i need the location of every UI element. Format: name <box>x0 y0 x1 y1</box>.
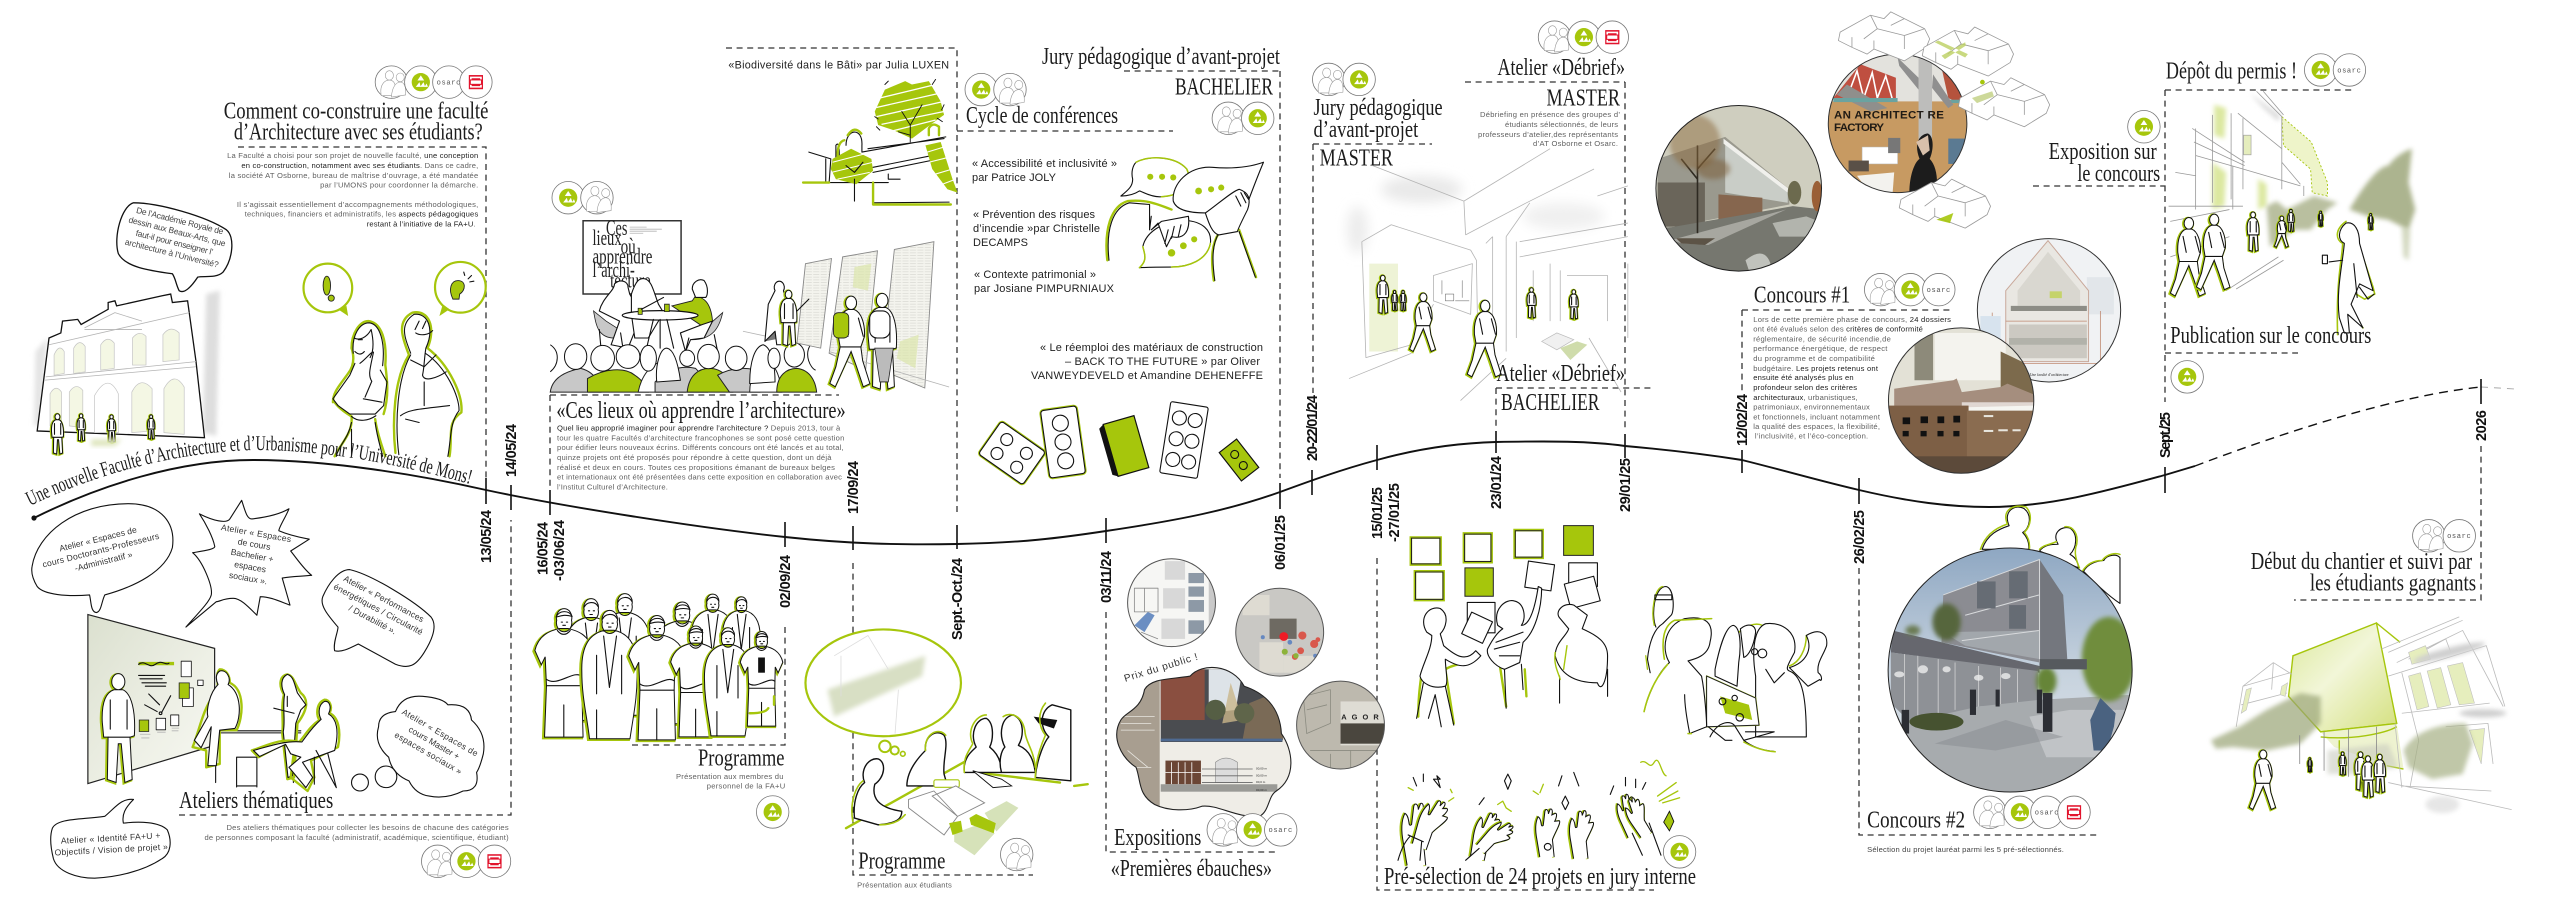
heading: exposition: Exposition sur <box>2049 138 2157 165</box>
logos <box>375 66 492 98</box>
heading: Concours #1 <box>1754 282 1850 309</box>
subheading: «Premières ébauches» <box>1111 855 1272 882</box>
speech bubble: star: Atelier « Espaces <box>220 522 292 544</box>
icon: light bulb bubble <box>435 262 486 316</box>
panel: expositions <box>1111 558 1385 882</box>
thought bubble: master: cours Master + <box>407 724 461 761</box>
timeline date labels: 03/11/24 <box>1099 551 1115 603</box>
text block: et fonctionnels, incluant notamment <box>1753 412 1881 421</box>
text block: Débriefing en présence des groupes d’ <box>1480 110 1620 119</box>
panel: programme personnel <box>534 594 789 828</box>
speech bubble: performances: / Durabilité ». <box>347 603 398 636</box>
timeline date labels: 14/05/24 <box>504 424 520 477</box>
heading: exposition: le concours <box>2077 160 2160 187</box>
text block: réalisé et deux en cours. Toutes ces propositions émanant de bureaux belges <box>557 463 835 472</box>
illustration: discussion hands and speech bubbles <box>1106 158 1263 281</box>
speech bubble: performances <box>322 570 434 666</box>
illustration: workshop participants <box>101 669 339 791</box>
text block: personnel de la FA+U <box>707 782 785 791</box>
logo <box>2171 361 2203 393</box>
thought bubble: master <box>352 696 484 797</box>
photo: section model <box>1977 238 2121 384</box>
timeline date labels: 17/09/24 <box>846 461 862 514</box>
timeline title: Une nouvelle Faculté d’Architecture et d’Urbanisme pour l’Université de Mons! <box>24 436 472 504</box>
text block: budgétaire. Les projets retenus ont <box>1753 364 1879 373</box>
panel: ces lieux où apprendre l'architecture <box>550 182 949 491</box>
logos <box>552 182 613 214</box>
speech bubble <box>117 203 232 292</box>
speech bubble: star: de cours <box>237 536 271 552</box>
speech bubble: performances: Atelier « Performances <box>342 573 426 624</box>
text block: Des ateliers thématiques pour collecter les besoins de chacune des catégories <box>226 823 509 832</box>
photo outline <box>1656 105 1822 271</box>
photo outline <box>1977 239 2121 382</box>
presentation screen: où <box>621 233 636 258</box>
text block: ont été évalués selon des critères de conformité <box>1753 325 1923 334</box>
photo: prize winning board: 00,00 m <box>1256 788 1267 792</box>
illustration: crowd <box>534 594 783 741</box>
logos <box>2304 54 2366 86</box>
text block: quinze projets ont été proposés pour répondre à cette question, dont un déjà <box>557 453 832 462</box>
illustration: construction bricks <box>978 401 1259 485</box>
panel: atelier débrief <box>1478 21 1629 416</box>
photo: prize winning board: 00,0 m <box>1256 780 1266 784</box>
text block: Lors de cette première phase de concours, 24 dossiers <box>1753 315 1951 324</box>
text block: lectures: « Prévention des risques <box>973 209 1096 221</box>
timeline date labels: 02/09/24 <box>778 555 794 608</box>
text block: tour les quatre Facultés d’architecture francophones se sont posé cette question <box>557 433 844 442</box>
heading: les étudiants gagnants <box>2310 570 2476 597</box>
presentation screen: apprendre <box>593 244 652 269</box>
photo: section model: on. Une faculté d’architecture <box>2024 373 2069 377</box>
photo outline <box>1888 548 2132 792</box>
text block: professeurs d’atelier,des représentants <box>1478 130 1618 139</box>
logos <box>1207 814 1297 846</box>
heading: Jury pédagogique d’avant-projet <box>1042 43 1280 70</box>
photo: prize winning board: 00,00 m <box>1256 773 1267 777</box>
speech bubble: star: espaces <box>234 559 267 575</box>
speech bubble: star: Bachelier + <box>230 547 274 564</box>
text block <box>204 823 509 842</box>
panel: jury bachelier <box>1042 43 1280 135</box>
logos <box>1312 63 1375 96</box>
text block: restant à l’initiative de la FA+U. <box>367 219 476 228</box>
heading: Concours #2 <box>1867 807 1965 834</box>
text block: lectures: DECAMPS <box>973 237 1028 249</box>
logo <box>756 796 789 828</box>
illustration: audience <box>550 343 817 392</box>
speech bubble: architecture à l’Université? <box>124 237 220 270</box>
illustration: historic building <box>34 291 220 454</box>
heading: d’avant-projet <box>1313 116 1418 143</box>
caption: Prix du public ! <box>1123 652 1199 685</box>
text block: lectures: « Contexte patrimonial » <box>974 269 1096 281</box>
logos <box>965 73 1026 106</box>
text block: lectures: d’incendie »par Christelle <box>973 223 1100 235</box>
photo: prize winning board: 00,00 m <box>1256 767 1267 771</box>
illustration: students around table <box>846 703 1088 855</box>
text block: la société AT Osborne, bureau de maîtrise d’ouvrage, a été mandatée <box>229 171 478 180</box>
timeline date labels: -27/01/25 <box>1387 483 1403 542</box>
text block: la qualité des espaces, la flexibilité, <box>1753 422 1880 431</box>
text block: La Faculté a choisi pour son projet de nouvelle faculté, une conception <box>227 151 478 160</box>
illustration: two students thinking <box>333 312 462 456</box>
heading <box>2251 548 2476 597</box>
photo: agora board: AGOR <box>1341 712 1384 721</box>
timeline date labels: 2026 <box>2474 410 2490 441</box>
illustration: project boards and people <box>1411 526 1608 727</box>
presentation screen: tecture <box>610 267 651 292</box>
timeline date labels: 06/01/25 <box>1273 515 1289 570</box>
speech bubble: dessin aux Beaux-Arts, que <box>128 215 227 248</box>
text block: lectures: – BACK TO THE FUTURE » par Oliver <box>1065 356 1260 368</box>
heading: second débrief: Atelier «Débrief» <box>1496 360 1625 387</box>
heading <box>1314 94 1443 172</box>
text block: du programme et de compatibilité <box>1753 354 1875 363</box>
speech bubble: doctorants: cours Doctorants-Professeurs <box>41 531 160 569</box>
photo: agora board <box>1297 681 1385 770</box>
text block: l’Institut Culturel d’Architecture. <box>557 482 668 491</box>
text block: techniques, financiers et administratifs, les aspects pédagogiques <box>245 210 478 219</box>
illustration: construction site building <box>2211 617 2512 813</box>
text block: réglementaire, de sécurité incendie,de <box>1753 334 1891 343</box>
thought bubble: master: espaces sociaux » <box>393 730 464 776</box>
logos <box>1212 102 1274 135</box>
speech bubble: performances: énergétiques / Circularité <box>332 581 425 637</box>
text block: Présentation aux étudiants <box>857 880 952 889</box>
logos: osarc <box>2035 810 2058 818</box>
timeline date labels: 15/01/25 <box>1370 487 1386 539</box>
logos: osarc <box>2447 533 2471 541</box>
photo outline <box>1828 54 1967 193</box>
illustration: interior sketch <box>1347 149 1628 401</box>
icon: exclamation bubble <box>304 264 352 316</box>
text block <box>1753 315 1951 441</box>
panel: début du chantier <box>2211 520 2512 813</box>
heading: Comment co-construire une faculté <box>224 97 488 124</box>
text block: en co-construction, notamment avec ses étudiants. Dans ce cadre, <box>241 161 478 170</box>
timeline date labels: Sept.-Oct./24 <box>950 558 966 640</box>
heading: Pré-sélection de 24 projets en jury interne <box>1384 863 1696 890</box>
text block: Sélection du projet lauréat parmi les 5 pré-sélectionnés. <box>1867 845 2064 854</box>
timeline date labels: -03/06/24 <box>552 520 568 581</box>
timeline curve <box>30 387 2515 544</box>
timeline date labels: 29/01/25 <box>1618 458 1634 512</box>
heading: Expositions <box>1114 824 1201 851</box>
text block: ensuite été analysés plus en <box>1753 373 1854 382</box>
timeline date labels: 12/02/24 <box>1735 394 1751 446</box>
panel: dépôt du permis and publication <box>2049 54 2415 393</box>
text block: l’inclusivité, et l’éco-conception. <box>1755 432 1868 441</box>
logos: osarc <box>1927 287 1950 295</box>
heading: MASTER <box>1320 145 1393 172</box>
heading: Programme <box>858 848 945 875</box>
panel: concours 1 <box>1753 273 1955 441</box>
text block: par l’UMONS pour coordonner la démarche. <box>320 181 478 190</box>
text block <box>227 151 478 228</box>
logo <box>1000 838 1033 871</box>
panel: ateliers thématiques <box>32 500 511 878</box>
subheading: BACHELIER <box>1501 389 1600 416</box>
text block: profondeur selon des critères <box>1753 383 1857 392</box>
logos <box>1538 21 1629 53</box>
text block: pour édifier leurs nouveaux écrins. Différents concours ont été lancés et au total, <box>557 443 844 452</box>
timeline date labels: Sept./25 <box>2158 412 2174 458</box>
logos <box>421 845 511 878</box>
text block: lectures: « Accessibilité et inclusivité » <box>972 158 1117 170</box>
photo: winning project render <box>1887 548 2136 794</box>
logos <box>1974 796 2090 829</box>
speech bubble: doctorants: Atelier « Espaces de <box>58 524 138 553</box>
photo: street render <box>1654 103 1823 275</box>
heading: Atelier «Débrief» <box>1498 54 1625 81</box>
heading: «Ces lieux où apprendre l’architecture» <box>556 397 846 424</box>
text block: Quel lieu approprié imaginer pour apprendre l’architecture ? Depuis 2013, tour à <box>557 424 841 433</box>
text block: étudiants sélectionnés, de leurs <box>1505 120 1618 129</box>
timeline date labels: 20-22/01/24 <box>1305 395 1321 461</box>
logos: osarc <box>2337 67 2361 75</box>
text block: architecturaux, urbanistiques, <box>1753 393 1858 402</box>
illustration: exhibition posters <box>743 242 949 390</box>
subheading: MASTER <box>1546 84 1620 112</box>
presentation screen <box>583 215 681 294</box>
speech bubble: identité: Objectifs / Vision de projet » <box>54 842 168 857</box>
timeline date labels <box>479 394 2490 640</box>
speech bubble: doctorants <box>32 504 173 613</box>
presentation screen: lieux <box>593 225 622 250</box>
presentation screen: l’archi- <box>593 257 635 282</box>
illustration: street view with people <box>2169 91 2415 335</box>
text block <box>557 424 844 491</box>
photo: voting map <box>1236 588 1324 677</box>
timeline date labels: 13/05/24 <box>479 510 495 563</box>
photo: architecture factory: FACTORY <box>1834 122 1884 134</box>
panel: cycle de conférences <box>965 73 1263 485</box>
speech bubble: identité <box>51 799 170 878</box>
illustration: pin board <box>88 615 215 784</box>
thought bubble: master: Atelier « Espaces de <box>400 707 480 759</box>
photo outline <box>1128 559 1215 647</box>
photo: architecture factory: AN ARCHITECT RE <box>1834 109 1944 121</box>
heading: Ateliers thématiques <box>179 787 333 814</box>
text block: lectures: par Patrice JOLY <box>972 172 1057 184</box>
logo <box>2128 111 2160 143</box>
timeline date labels: 26/02/25 <box>1852 510 1868 564</box>
illustration: applauding hands <box>1398 772 1594 866</box>
illustration: round table talk <box>594 279 723 352</box>
illustration: onlookers behind the render <box>1980 506 2120 603</box>
text block: et internationaux ont été présentées dans cette exposition en collaboration avec <box>557 473 842 482</box>
subheading: BACHELIER <box>1175 74 1273 101</box>
logos <box>1864 273 1955 306</box>
panel: jury master and débrief interior <box>1312 63 1628 401</box>
text block: patrimoniaux, environnementaux <box>1753 403 1870 412</box>
photo outline <box>1888 328 2034 473</box>
panel: concours 2 <box>1867 506 2136 854</box>
text block: Il s’agissait essentiellement d’accompagnements méthodologiques, <box>237 200 478 209</box>
speech bubble: star <box>186 500 312 627</box>
logos: osarc <box>437 79 460 87</box>
photo outline <box>1236 588 1324 676</box>
text block: lectures: par Josiane PIMPURNIAUX <box>974 283 1115 295</box>
timeline date labels: 23/01/24 <box>1489 456 1505 509</box>
panel: co-construction <box>34 66 492 456</box>
text block: de personnes composant la faculté (administratif, académique, scientifique, étudiant) <box>204 833 509 842</box>
illustration: axonometric models <box>1838 12 2050 228</box>
timeline date labels: 16/05/24 <box>536 522 552 575</box>
panel: pré-sélection <box>1384 526 1696 890</box>
photo: cardboard model <box>1887 328 2038 477</box>
presentation screen: Ces <box>606 215 627 240</box>
heading: Programme <box>698 745 785 772</box>
photo: prize winning board <box>1114 666 1293 816</box>
photo: plans board <box>1128 558 1217 649</box>
text block: performance énergétique, de respect <box>1753 344 1888 353</box>
heading: publication: Publication sur le concours <box>2170 322 2371 349</box>
text block: lectures: « Le réemploi des matériaux de construction <box>1040 342 1263 354</box>
heading: exposition <box>2049 138 2160 187</box>
text block <box>676 772 785 791</box>
thought bubble with sketch <box>805 629 961 756</box>
speech bubble: identité: Atelier « Identité FA+U + <box>61 830 161 846</box>
speech bubble: De l’Académie Royale de <box>135 205 225 236</box>
heading: Dépôt du permis ! <box>2166 57 2297 84</box>
heading: Cycle de conférences <box>966 102 1118 129</box>
speech bubble: doctorants: -Administratif » <box>74 549 134 573</box>
text block: d’AT Osborne et Osarc. <box>1533 139 1618 148</box>
text block: lectures <box>972 158 1263 382</box>
heading: Jury pédagogique <box>1313 94 1443 121</box>
text block: lectures: VANWEYDEVELD et Amandine DEHENEFFE <box>1031 370 1263 382</box>
logo <box>1663 836 1696 868</box>
illustration: jury group <box>1644 587 1827 752</box>
text block: Présentation aux membres du <box>676 772 783 781</box>
text block: «Biodiversité dans le Bâti» par Julia LUXEN <box>728 59 949 71</box>
photo: architecture factory <box>1827 52 1969 196</box>
panel: programme étudiants <box>805 629 1088 889</box>
illustration: trees and bench <box>803 79 958 204</box>
heading: d’Architecture avec ses étudiants? <box>234 119 483 146</box>
logos: osarc <box>1269 827 1292 835</box>
logos <box>2413 520 2475 552</box>
panel: photo collage <box>1654 12 2121 477</box>
text block <box>1478 110 1620 148</box>
heading <box>224 97 488 146</box>
speech bubble: star: sociaux ». <box>228 570 268 586</box>
photo outline <box>1297 681 1384 769</box>
heading: Début du chantier et suivi par <box>2251 548 2472 575</box>
panel: biodiversité <box>728 59 958 204</box>
speech bubble: faut-il pour enseigner l’ <box>135 228 214 257</box>
